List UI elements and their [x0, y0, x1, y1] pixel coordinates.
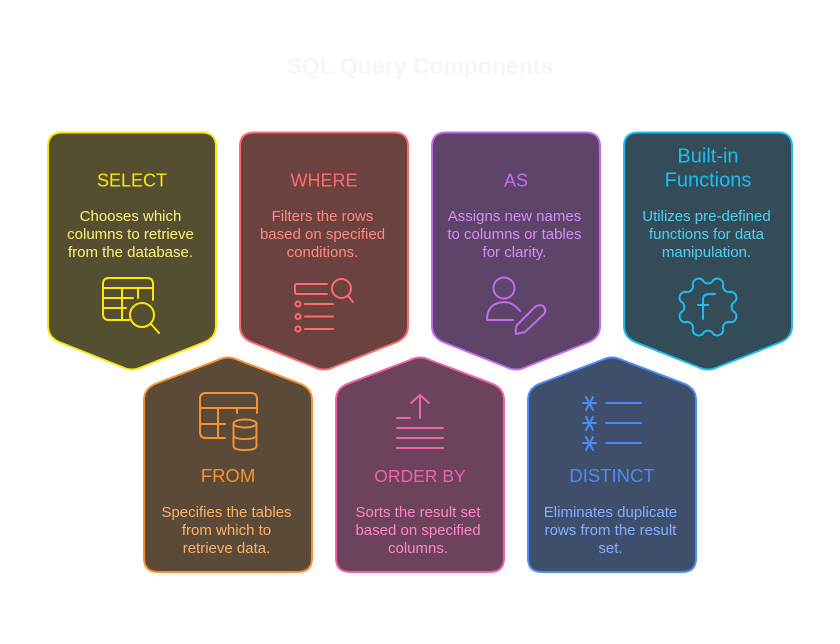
heading: AS: AS — [504, 170, 528, 190]
card shape: DISTINCT — [528, 358, 696, 572]
text: Built-in Functions description: functions for data — [649, 226, 765, 243]
icon: filter list with magnifier — [295, 279, 353, 332]
text: SELECT description: Chooses which — [80, 208, 181, 225]
icon: table with database — [200, 393, 257, 450]
text: FROM description: retrieve data. — [183, 540, 270, 557]
icon: user with pencil — [487, 278, 545, 334]
text: WHERE description: based on specified — [260, 226, 385, 243]
heading: SELECT: SELECT — [97, 170, 167, 190]
text: Built-in Functions description: manipulation. — [662, 244, 751, 261]
text: FROM description: from which to — [182, 522, 271, 539]
card shape: ORDER BY — [336, 358, 504, 572]
icon: table with magnifier — [103, 278, 159, 333]
heading: ORDER BY: ORDER BY — [374, 466, 466, 486]
text: DISTINCT description: set. — [598, 540, 623, 557]
icon: function badge — [680, 279, 736, 335]
text: AS description: for clarity. — [483, 244, 546, 261]
panel: WHERE — [240, 132, 408, 370]
panel: AS — [432, 132, 600, 370]
card shape: SELECT — [48, 132, 216, 370]
heading: WHERE: WHERE — [290, 170, 358, 190]
heading: Built-in Functions: Functions — [665, 170, 751, 192]
text: ORDER BY description: columns. — [388, 540, 448, 557]
panel: FROM — [144, 358, 312, 572]
card shape: Built-in Functions — [624, 132, 792, 370]
text: ORDER BY description: based on specified — [355, 522, 481, 539]
icon: sort arrow with lines — [397, 395, 443, 448]
text: ORDER BY description: Sorts the result set — [355, 504, 481, 521]
panel: SELECT — [48, 132, 216, 370]
text: FROM description: Specifies the tables — [161, 504, 292, 521]
heading: DISTINCT: DISTINCT — [569, 465, 655, 486]
text: DISTINCT description: rows from the result — [545, 522, 677, 539]
panel: Built-in Functions — [624, 132, 792, 370]
text: SELECT description: from the database. — [68, 244, 193, 261]
text: SELECT description: columns to retrieve — [67, 226, 194, 243]
icon: asterisk list — [583, 397, 641, 450]
text: WHERE description: conditions. — [287, 244, 358, 261]
title: SQL Query Components — [287, 53, 553, 79]
heading: FROM: FROM — [201, 465, 255, 486]
text: AS description: Assigns new names — [448, 208, 581, 225]
text: Built-in Functions description: Utilizes pre-defined — [642, 208, 771, 225]
panel: ORDER BY — [336, 358, 504, 572]
text: AS description: to columns or tables — [447, 226, 582, 243]
heading: Built-in Functions: Built-in — [677, 146, 739, 168]
text: WHERE description: Filters the rows — [272, 208, 373, 225]
card shape: FROM — [144, 358, 312, 572]
card shape: AS — [432, 132, 600, 370]
text: DISTINCT description: Eliminates duplicate — [544, 504, 677, 521]
panel: DISTINCT — [528, 358, 696, 572]
card shape: WHERE — [240, 132, 408, 370]
